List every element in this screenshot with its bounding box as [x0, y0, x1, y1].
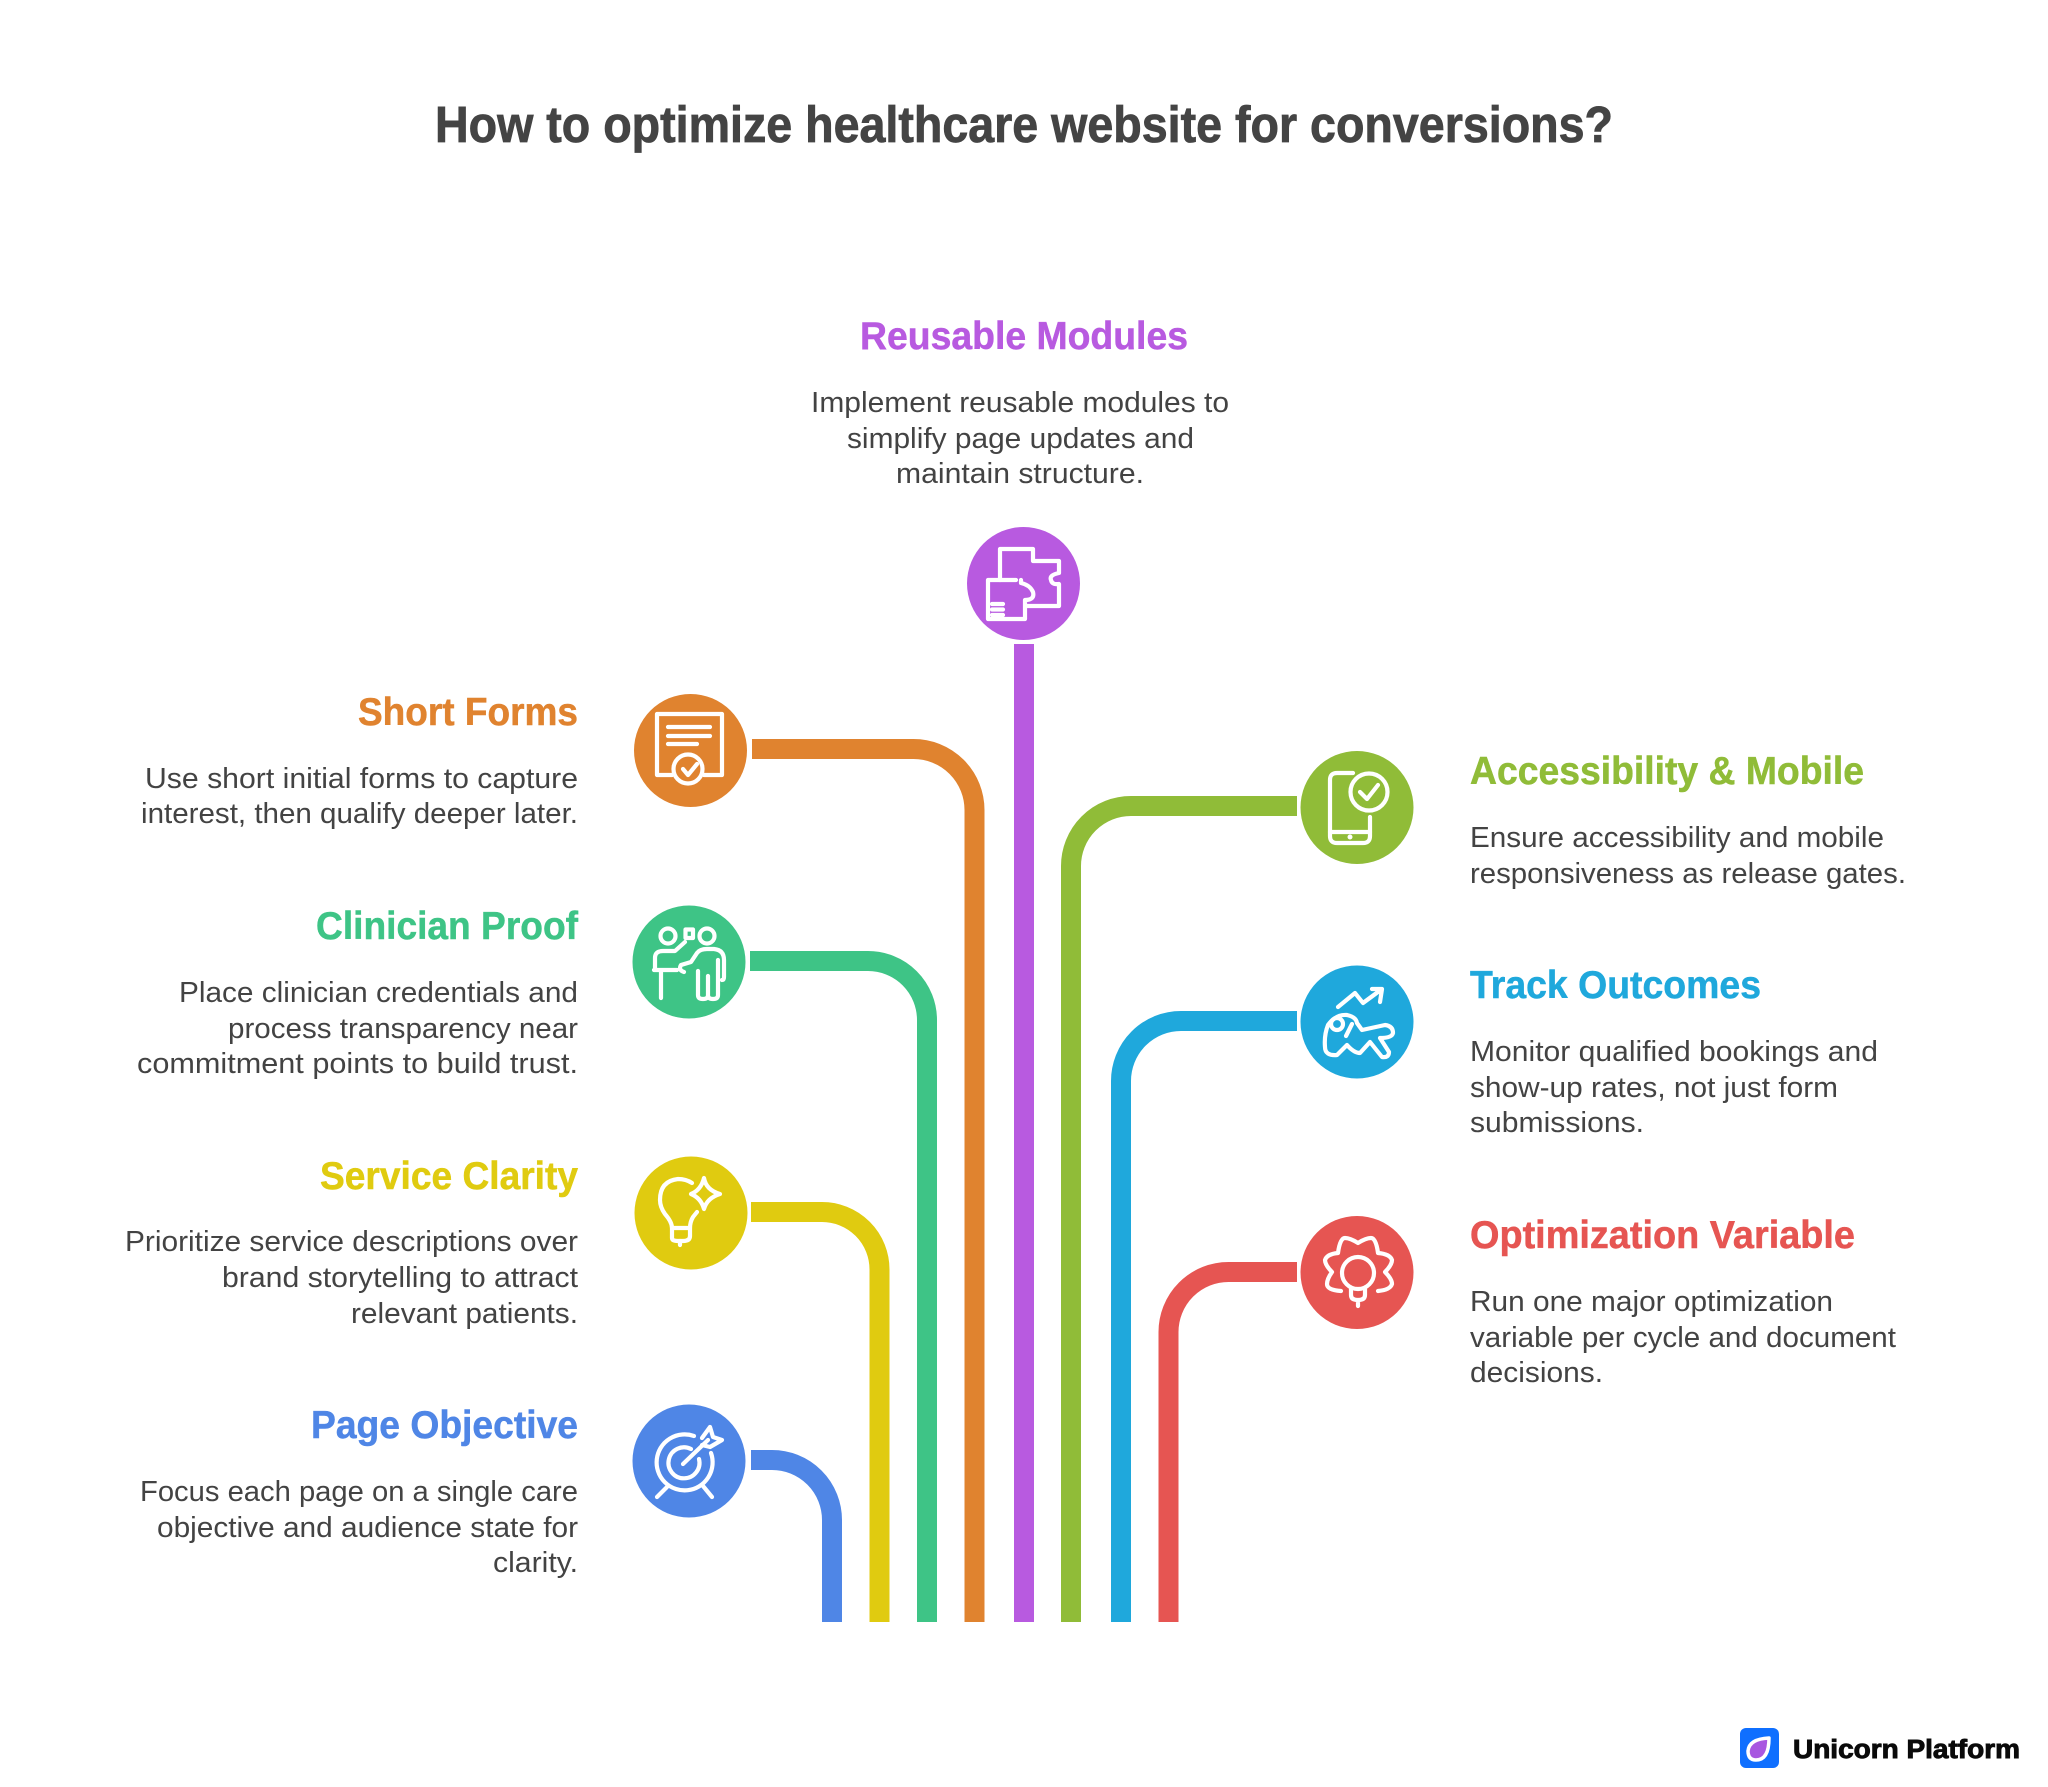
description: clinician proof: process transparency near [228, 1013, 579, 1045]
heading: clinician proof: Clinician Proof [316, 905, 578, 948]
connector: track outcomes [1121, 1021, 1297, 1622]
connector: reusable modules [1014, 644, 1034, 1622]
heading: accessibility and mobile: Accessibility & Mobile [1470, 750, 1864, 793]
description: page objective: clarity. [493, 1547, 578, 1579]
text block: page objective [140, 1404, 579, 1579]
text block: optimization variable [1470, 1214, 1896, 1389]
description: reusable modules: simplify page updates and [847, 423, 1194, 455]
description: accessibility and mobile: responsiveness as release gates. [1470, 858, 1906, 890]
text block: track outcomes [1470, 964, 1878, 1139]
icon: target with arrow [632, 1404, 746, 1518]
description: short forms [141, 763, 578, 830]
description: track outcomes: submissions. [1470, 1107, 1644, 1139]
icon: rising arrow over reclining patient [1300, 966, 1414, 1078]
icon: lightbulb with sparkle [634, 1156, 748, 1270]
description: track outcomes: show-up rates, not just form [1470, 1072, 1838, 1104]
connector: short forms [752, 749, 974, 1622]
description: reusable modules [811, 387, 1229, 490]
description: reusable modules: Implement reusable modules to [811, 387, 1229, 419]
description: short forms: Use short initial forms to capture [145, 763, 578, 795]
description: service clarity: relevant patients. [351, 1298, 578, 1330]
description: page objective [140, 1476, 579, 1579]
text block: reusable modules [811, 315, 1229, 490]
description: optimization variable: Run one major optimization [1470, 1286, 1833, 1318]
description: accessibility and mobile: Ensure accessibility and mobile [1470, 822, 1884, 854]
description: optimization variable: decisions. [1470, 1357, 1603, 1389]
heading: service clarity: Service Clarity [320, 1155, 579, 1198]
logo: unicorn platform [1740, 1728, 2020, 1768]
heading: short forms: Short Forms [358, 691, 578, 734]
connector: optimization variable [1168, 1272, 1297, 1622]
description: optimization variable [1470, 1286, 1896, 1389]
description: page objective: objective and audience state for [157, 1512, 579, 1544]
heading: reusable modules: Reusable Modules [860, 315, 1188, 358]
description: accessibility and mobile [1470, 822, 1906, 890]
description: page objective: Focus each page on a single care [140, 1476, 578, 1508]
description: reusable modules: maintain structure. [896, 458, 1144, 490]
icon: mobile phone with check [1300, 751, 1414, 864]
description: clinician proof: Place clinician credentials and [179, 977, 578, 1009]
description: clinician proof: commitment points to build trust. [137, 1048, 578, 1080]
text block: accessibility and mobile [1470, 750, 1906, 890]
logo wordmark: Unicorn Platform [1793, 1736, 2020, 1764]
description: clinician proof [137, 977, 579, 1080]
text block: clinician proof [137, 905, 579, 1080]
icon: form with check [634, 694, 747, 807]
icon: gear with lightbulb [1300, 1216, 1414, 1329]
description: short forms: interest, then qualify deeper later. [141, 798, 578, 830]
title: How to optimize healthcare website for conversions? [435, 96, 1613, 153]
text block: short forms [141, 691, 578, 830]
description: optimization variable: variable per cycle and document [1470, 1322, 1896, 1354]
heading: track outcomes: Track Outcomes [1470, 964, 1761, 1007]
heading: optimization variable: Optimization Variable [1470, 1214, 1855, 1257]
connector: clinician proof [750, 961, 927, 1622]
description: service clarity: brand storytelling to attract [222, 1262, 578, 1294]
connector: service clarity [751, 1212, 880, 1622]
icon: logo mark [1740, 1728, 1779, 1768]
connector: accessibility and mobile [1071, 806, 1297, 1622]
connector: page objective [751, 1460, 832, 1622]
description: track outcomes: Monitor qualified bookings and [1470, 1036, 1878, 1068]
description: service clarity: Prioritize service descriptions over [125, 1226, 579, 1258]
heading: page objective: Page Objective [311, 1404, 578, 1447]
icon: clinician and patient [632, 906, 746, 1018]
text block: service clarity [125, 1155, 579, 1330]
description: service clarity [125, 1226, 579, 1330]
icon: puzzle modules [967, 527, 1080, 640]
description: track outcomes [1470, 1036, 1878, 1139]
